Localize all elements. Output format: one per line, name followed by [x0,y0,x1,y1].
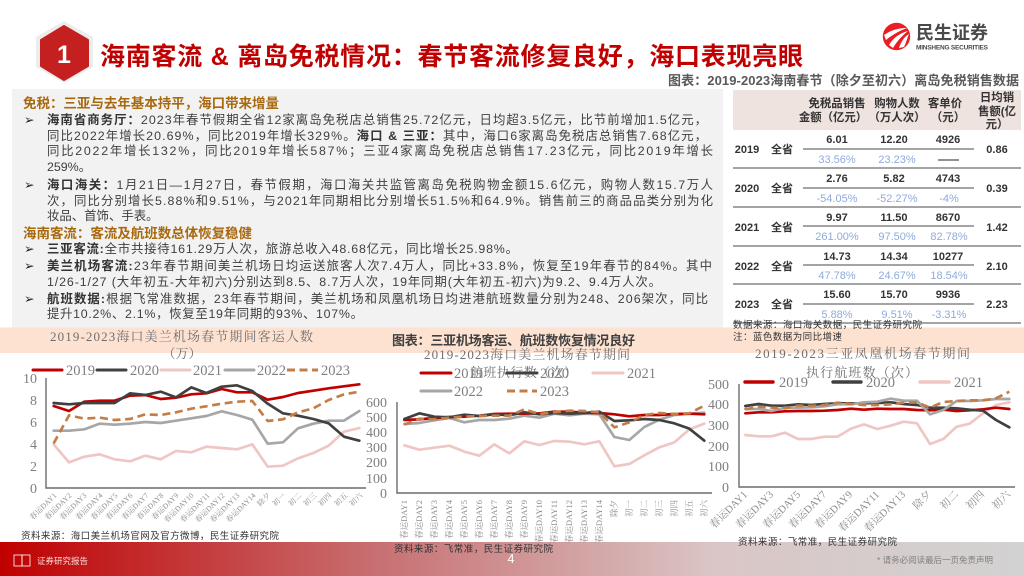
y axis labels: 100 [366,472,387,487]
x axis labels: 春运DAY3 [429,500,439,539]
x axis labels: 春运DAY13 [861,488,908,535]
row 2020: 0.39 [986,183,1008,195]
row 2019: 全省 [771,142,793,156]
row 2022: 2.10 [986,261,1008,273]
title: 海南客流 & 离岛免税情况：春节客流修复良好，海口表现亮眼 [100,42,803,71]
legend: 2023 [540,384,569,400]
row 2022: 10277 [933,251,963,263]
legend: 2019 [779,375,808,391]
row 2021: 1.42 [986,222,1008,234]
icon: section number hexagon: 1 [57,41,71,69]
row 2021: 8670 [936,212,960,224]
row 2021: 9.97 [826,212,848,224]
table header: （万人次） [869,110,925,124]
y axis labels: 200 [708,440,729,455]
bullet: Sanya: ➢ [24,241,34,256]
row 2022: 全省 [771,259,793,273]
legend: 2020 [130,363,159,379]
row 2023: 全省 [771,297,793,311]
table header: 金额（亿元） [799,110,867,124]
x axis labels: 初一 [270,490,288,508]
chart: Meilan flights [366,333,712,555]
chart title: 2019-2023海口美兰机场春节期间 [424,347,630,362]
row 2020: 2020 [735,183,759,195]
row 2023: 15.70 [880,289,908,301]
x axis labels: 春运DAY12 [564,500,574,543]
axes [739,384,1015,487]
icon: section number hexagon [36,21,93,83]
y axis labels: 600 [366,396,387,411]
table header: 购物人数 [874,96,920,110]
row 2019: 6.01 [826,134,848,146]
x axis labels: 初四 [316,490,334,508]
legend: 2023 [321,363,350,379]
chart source: 资料来源：海口美兰机场官网及官方微博，民生证券研究院 [21,530,279,542]
y axis labels: 10 [23,372,37,387]
x axis labels: 除夕 [910,488,934,512]
y axis labels: 100 [708,460,729,475]
chart: Meilan passengers [21,329,366,542]
bullet: Hainan commerce department: ➢ [24,112,34,127]
row 2022: 14.34 [880,251,909,263]
row 2023: 9.51% [881,309,913,321]
x axis labels: 初五 [332,490,350,508]
bullet: Haikou customs: 妆品、首饰、手表。 [47,209,159,223]
x axis labels: 春运DAY2 [42,490,74,522]
x axis labels: 初三 [654,500,664,517]
table heading: 图表：2019-2023海南春节（除夕至初六）离岛免税销售数据 [668,73,1019,88]
row 2022: 24.67% [878,270,916,282]
table source note: 注：蓝色数据为同比增速 [733,331,842,343]
x axis labels: 春运DAY13 [207,490,242,524]
footer band [0,542,1024,576]
bullet: Meilan airport: ➢ [24,258,34,273]
row 2019: 2019 [735,144,759,156]
legend: 2022 [257,363,286,379]
chart title: 执行航班数（次） [806,365,918,380]
y axis labels: 400 [366,426,387,441]
x axis labels: 初一 [624,500,634,517]
x axis labels: 春运DAY3 [57,490,89,522]
axes [397,402,712,493]
table header: 客单价 [928,96,963,110]
row 2022: 18.54% [930,270,968,282]
x axis labels: 初三 [301,490,319,508]
bullet: Hainan commerce department: 海南省商务厅：2023年春节假期全省12家离岛免税店总销售25.72亿元，日均超3.5亿元，比节前增加1.5亿元， [47,112,707,127]
row 2020: 4743 [936,173,960,185]
y axis labels: 0 [722,481,729,496]
row 2020: 2.76 [826,173,848,185]
bullet: Meilan airport: 1/26-1/27 (大年初五-大年初六)分别达到8.5、8.7万人次，19年同期(大年初五-初六)为9.2、9.4万人次。 [47,275,661,289]
x axis labels: 春运DAY10 [161,490,196,524]
section heading: 图表：三亚机场客运、航班数恢复情况良好 [392,333,635,348]
rows separators [733,149,1021,323]
row 2021: 11.50 [881,212,907,224]
row 2023: 9936 [936,289,960,301]
row 2021 [735,212,1008,243]
icon: book [14,555,30,566]
x axis labels: 春运DAY11 [178,490,212,524]
row 2023: 2023 [735,299,759,311]
row 2022: 47.78% [818,270,856,282]
x axis labels: 春运DAY14 [223,490,258,524]
row 2020: 5.82 [883,173,905,185]
x axis labels: 春运DAY11 [836,488,882,535]
y axis labels: 300 [366,441,387,456]
axes [46,378,366,488]
table header: （元） [931,111,965,124]
row 2023: -3.31% [932,309,967,321]
x axis labels: 春运DAY2 [414,500,424,539]
row 2021: 全省 [771,220,793,234]
band: chart title strip [0,328,1024,353]
bullet: Sanya: 三亚客流:全市共接待161.29万人次，旅游总收入48.68亿元，同比增长25.98%。 [47,241,518,256]
x axis labels: 春运DAY7 [786,488,829,531]
row 2019: 12.20 [880,134,908,146]
chart title: 航班执行数（次） [470,365,577,380]
x axis labels: 初二 [639,500,649,517]
x axis labels: 春运DAY4 [73,490,105,522]
disclaimer: * 请务必阅读最后一页免责声明 [877,555,993,565]
x axis labels: 初四 [963,488,987,512]
x axis labels: 春运DAY14 [594,499,604,543]
x axis labels [707,488,1013,535]
y axis labels: 500 [366,411,387,426]
table header [733,90,1021,131]
bullet: Hainan commerce department: 259%。 [47,160,91,174]
row 2023: 5.88% [821,309,853,321]
y axis labels: 0 [380,487,387,502]
bullet: flight data: 航班数据:根据飞常准数据，23年春节期间，美兰机场和凤凰机场日均进港航班数量分别为248、206架次，同比 [47,291,708,306]
legend: 2021 [954,375,983,391]
row 2019: 23.23% [878,154,916,166]
x axis labels: 初六 [347,490,365,508]
x axis labels: 初四 [669,500,679,517]
legend: 2021 [193,363,222,379]
chart: Fenghuang flights [707,346,1015,548]
heading: passenger flow: 海南客流：客流及航班数总体恢复稳健 [23,225,252,241]
x axis labels: 春运DAY1 [27,490,59,522]
legend [33,363,350,379]
row 2021: 2021 [735,222,759,234]
y axis labels: 400 [708,398,729,413]
bullet: flight data [24,291,708,321]
row 2020: -54.05% [817,193,858,205]
x axis labels: 春运DAY1 [399,500,409,539]
row 2022: 14.73 [823,251,851,263]
x axis labels: 春运DAY3 [733,488,776,531]
bullet: Meilan airport: 美兰机场客流:23年春节期间美兰机场日均运送旅客人次7.4万人，同比+33.8%，恢复至19年春节的84%。其中 [47,258,712,273]
x axis labels: 春运DAY5 [760,488,803,531]
row 2022: 2022 [735,261,759,273]
row 2023: 2.23 [986,299,1008,311]
x axis labels: 初六 [989,488,1013,512]
legend [421,366,656,400]
y axis labels: 200 [366,456,387,471]
y axis labels [708,378,729,496]
bullet: flight data: 提升10.2%、2.1%，恢复至19年同期的93%、107%。 [47,306,363,321]
row 2020: -52.27% [877,193,918,205]
lines [745,392,1009,444]
bullet: Meilan airport [24,258,712,289]
x axis labels: 春运DAY8 [134,490,166,522]
y axis labels: 300 [708,419,729,434]
x axis labels: 春运DAY9 [519,500,529,539]
row 2019: 0.86 [986,144,1008,156]
lines [54,384,359,467]
y axis labels [23,372,37,497]
text block: duty free and passenger flow [23,95,713,321]
lines [404,406,704,466]
x axis labels: 春运DAY6 [103,490,135,522]
row 2019 [735,134,1008,166]
y axis labels: 6 [30,416,37,431]
heading: duty free: 免税：三亚与去年基本持平，海口带来增量 [23,95,279,111]
x axis labels: 初二 [937,488,961,512]
row 2021: 82.78% [930,231,968,243]
x axis labels: 春运DAY9 [812,488,855,531]
x axis labels: 初六 [699,500,709,517]
row 2021: 97.50% [878,231,916,243]
chart source: 资料来源：飞常准，民生证券研究院 [394,543,553,555]
x axis labels: 初二 [286,490,304,508]
footer label: 证券研究报告 [37,556,88,566]
table header: 元） [986,118,1008,131]
panel: text background [12,89,723,329]
bullet: Haikou customs: 海口海关：1月21日—1月27日，春节假期，海口海关共监管离岛免税购物金额15.6亿元，购物人数15.7万人 [47,177,713,192]
x axis labels: 春运DAY1 [707,488,750,531]
x axis labels: 春运DAY10 [534,500,544,543]
x axis labels: 春运DAY8 [504,500,514,539]
chart title [50,329,313,361]
legend: 2019 [66,363,95,379]
y axis labels: 500 [708,378,729,393]
row 2023: 15.60 [823,289,851,301]
chart title: 2019-2023三亚凤凰机场春节期间 [755,346,970,361]
x axis labels: 春运DAY12 [192,490,227,524]
x axis labels: 春运DAY9 [149,490,181,522]
legend: 2020 [540,366,569,382]
legend: 2020 [866,375,895,391]
table source note: 数据来源：海口海关数据，民生证券研究院 [733,319,922,331]
chart title [424,347,630,380]
table header: 免税品销售 [809,96,865,110]
y axis labels: 4 [30,438,37,453]
y axis labels: 8 [30,394,37,409]
bullet: Haikou customs: 次，同比分别增长5.88%和9.51%，与2021年同期相比分别增长51.5%和64.9%。销售前三的商品品类分别为化 [47,193,713,208]
chart source: 资料来源：飞常准，民生证券研究院 [738,536,897,548]
row 2019: 4926 [936,134,960,146]
row 2022 [735,251,1008,282]
bullet: Haikou customs: ➢ [24,177,34,192]
table header: 售额(亿 [978,104,1016,118]
bullet: Hainan commerce department: 同比2022年增长132%，同比2019年增长587%；三亚4家离岛免税店总销售17.23亿元，同比2019年增长 [47,143,713,158]
x axis labels: 春运DAY7 [489,500,499,539]
x axis labels: 春运DAY11 [549,500,559,543]
legend: 2022 [454,384,483,400]
bullet: Hainan commerce department [24,112,713,174]
row 2023 [735,289,1008,321]
x axis labels: 春运DAY4 [444,499,454,539]
legend: 2021 [627,366,656,382]
row 2020: -4% [939,193,959,205]
x axis labels [399,499,709,543]
chart title [755,346,970,380]
bullet: Haikou customs [24,177,713,223]
x axis labels [27,490,365,524]
x axis labels: 春运DAY6 [474,500,484,539]
page number: 4 [508,552,515,566]
table source note [733,319,922,343]
x axis labels: 初五 [684,500,694,517]
x axis labels: 春运DAY5 [459,500,469,539]
x axis labels: 除夕 [609,500,619,517]
logo: Minsheng Securities: MINSHENG SECURITIES [916,44,989,52]
row 2021: 261.00% [815,231,859,243]
y axis labels [366,396,387,502]
y axis labels: 0 [30,482,37,497]
bullet: flight data: ➢ [24,291,34,306]
row 2020: 全省 [771,181,793,195]
table: duty free sales [733,90,1021,323]
chart title: 2019-2023海口美兰机场春节期间客运人数 [50,329,313,344]
x axis labels: 春运DAY5 [88,490,120,522]
table header: 日均销 [980,90,1014,104]
logo: Minsheng Securities [883,22,989,52]
row 2019: 33.56% [818,154,856,166]
legend [745,375,983,391]
chart title: （万） [162,346,202,361]
x axis labels: 春运DAY13 [579,500,589,543]
y axis labels: 2 [30,460,37,475]
x axis labels: 春运DAY7 [119,490,151,522]
legend: 2019 [454,366,483,382]
row 2020 [735,173,1008,205]
bullet: Hainan commerce department: 同比2022年增长20.69%，同比2019年增长329%。海口 & 三亚：其中，海口6家离岛免税店总销售7.68亿元， [47,128,707,143]
x axis labels: 除夕 [255,490,272,508]
logo: Minsheng Securities: 民生证券 [916,22,988,43]
